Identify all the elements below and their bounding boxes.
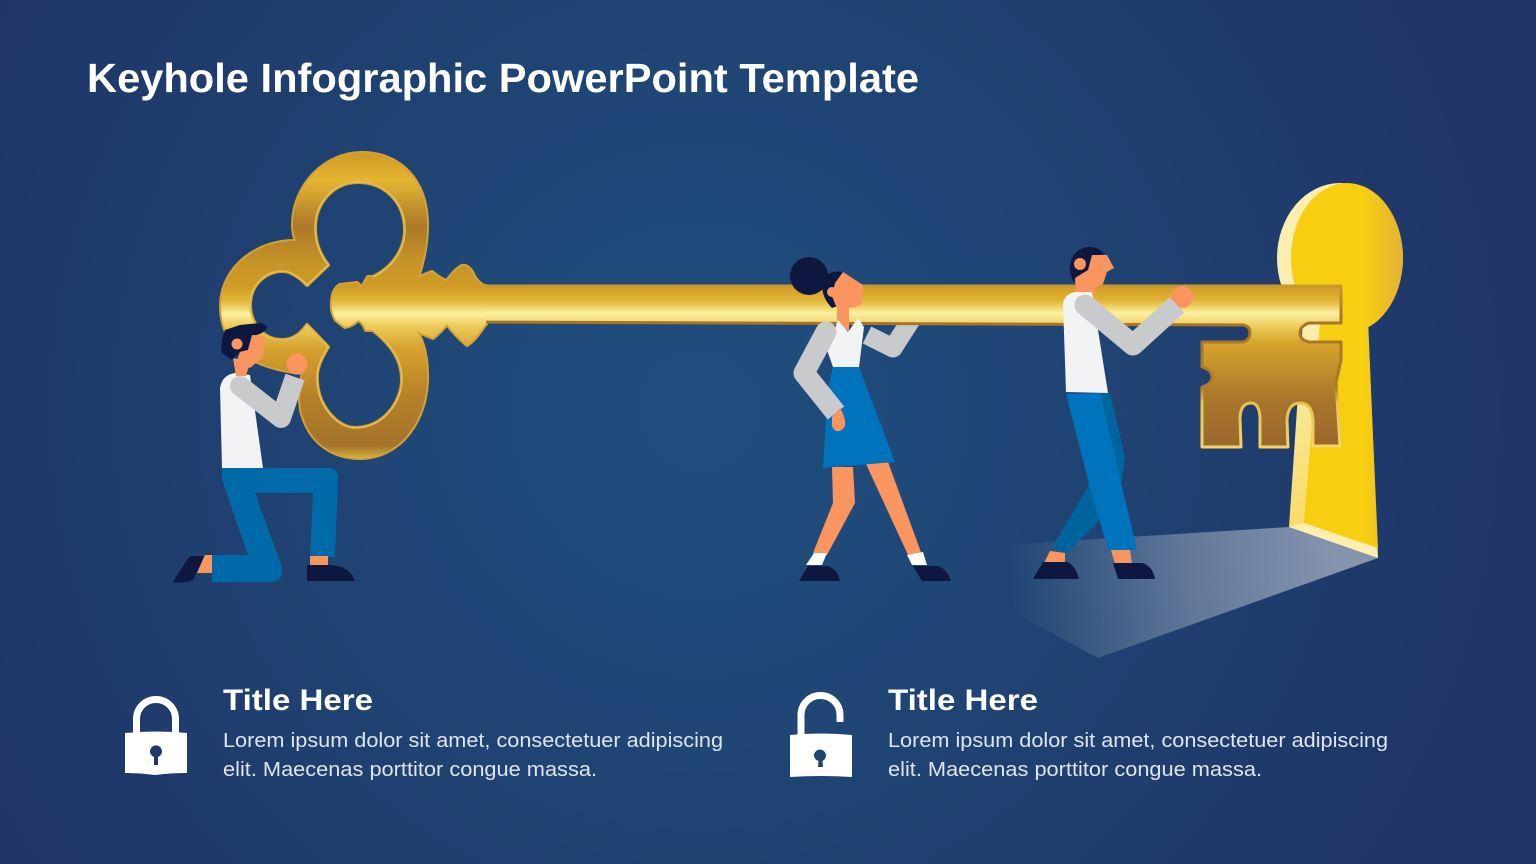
arm (1085, 305, 1177, 345)
heading: Title Here (888, 684, 1038, 717)
bow inner rim (250, 182, 405, 428)
front leg (1066, 393, 1137, 550)
body text (223, 730, 723, 781)
front foot (310, 556, 328, 566)
hand (286, 354, 308, 374)
front arm (804, 332, 836, 413)
hair (1070, 247, 1104, 282)
title: Keyhole Infographic PowerPoint Template (87, 55, 919, 101)
key outline (221, 153, 486, 458)
body text: Lorem ipsum dolor sit amet, consectetuer adipiscing (888, 730, 1388, 752)
golden key (221, 153, 1341, 458)
body text: Lorem ipsum dolor sit amet, consectetuer adipiscing (223, 730, 723, 752)
back leg (813, 467, 855, 555)
text block: left (223, 684, 723, 781)
head (832, 272, 863, 308)
back foot (197, 555, 212, 573)
ear (232, 338, 242, 350)
shoes (799, 566, 840, 581)
feet (1044, 551, 1065, 563)
head (236, 335, 265, 368)
heading: Title Here (223, 684, 373, 717)
hand (832, 408, 845, 431)
neck (837, 300, 849, 332)
icon: open padlock (790, 696, 852, 777)
skirt (823, 367, 895, 468)
hair bun (790, 257, 828, 295)
hand (1171, 286, 1193, 308)
ear (1074, 258, 1086, 270)
man kneeling (173, 323, 355, 583)
key shaft and bit (478, 286, 1341, 447)
icon: closed padlock (125, 700, 187, 775)
light beam from keyhole (1000, 527, 1378, 658)
keyhole (1277, 183, 1403, 558)
man walking (1033, 247, 1193, 579)
keyhole bevel (1277, 183, 1403, 558)
key bow (221, 153, 486, 458)
woman rear arm behind key (867, 320, 911, 348)
shirt (220, 373, 263, 468)
keyhole floor bevel (1289, 523, 1378, 558)
blouse (827, 318, 864, 367)
back leg (1052, 393, 1125, 553)
pants (212, 468, 338, 582)
front leg (866, 462, 922, 555)
body text (888, 730, 1388, 781)
shirt (1063, 292, 1108, 393)
shoes (1033, 562, 1079, 579)
woman walking (790, 257, 951, 581)
keyhole opening (1291, 183, 1403, 548)
head and neck (1075, 255, 1114, 294)
neck (233, 358, 250, 376)
socks (806, 553, 827, 565)
hair (822, 271, 843, 308)
arm (240, 377, 295, 418)
body text: elit. Maecenas porttitor congue massa. (888, 759, 1262, 781)
hair (221, 323, 267, 360)
text block: right (888, 684, 1388, 781)
body text: elit. Maecenas porttitor congue massa. (223, 759, 597, 781)
ear (827, 287, 837, 297)
